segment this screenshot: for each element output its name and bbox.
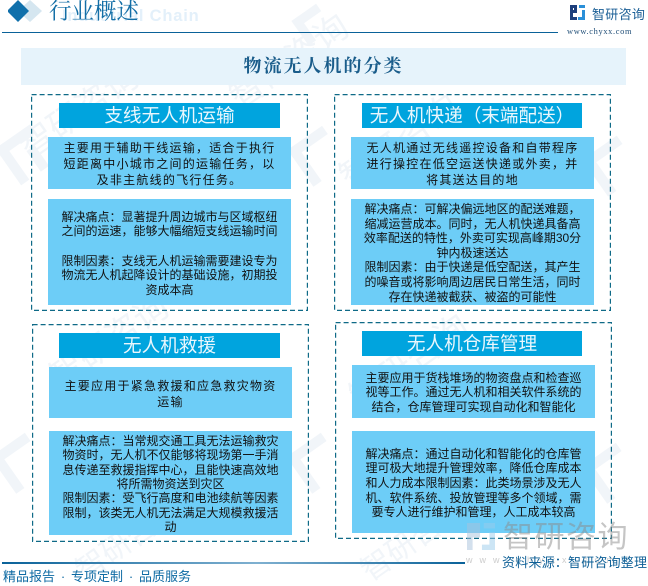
pain points and limits box: 将所需物资送到灾区 [116, 477, 224, 491]
description box [352, 365, 595, 418]
description box [48, 137, 291, 189]
pain points and limits box: 的噪音或将影响周边居民日常生活，同时 [364, 275, 580, 289]
pain points and limits box: 和人力成本限制因素：此类场景涉及无人 [365, 476, 582, 490]
description box: 主要应用于紧急救援和应急救灾物资 [64, 379, 276, 393]
title band [21, 48, 626, 85]
pain points and limits box: 缩减运营成本。同时，无人机快递具备高 [364, 217, 580, 231]
footer rule [2, 562, 465, 564]
header rule [2, 32, 558, 33]
pain points and limits box: 要专人进行维护和管理，人工成本较高 [371, 505, 576, 519]
pain points and limits box: 物资时，无人机不仅能够将现场第一手消 [62, 448, 278, 462]
text: 智研咨询 [13, 57, 146, 167]
pain points and limits box: 理可极大地提升管理效率，降低仓库成本 [365, 461, 582, 475]
brand url: www.chyxx.com [567, 27, 632, 36]
pain points and limits box: 限制因素：由于快递是低空配送，其产生 [364, 260, 580, 274]
pain points and limits box: 动 [164, 520, 176, 534]
watermark name: 智研咨询 [503, 521, 629, 554]
description box: 将其送达目的地 [426, 173, 519, 187]
pain points and limits box: 解决痛点：可解决偏远地区的配送难题， [364, 202, 580, 216]
footer slogan: · [61, 569, 65, 584]
panel title [59, 103, 280, 128]
brand name: 智研咨询 [592, 7, 645, 22]
description box: 及非主航线的飞行任务。 [97, 173, 242, 187]
pain points and limits box: 解决痛点：通过自动化和智能化的仓库管 [365, 447, 582, 461]
panel: 无人机仓库管理 [335, 322, 612, 539]
pain points and limits box [48, 199, 291, 305]
pain points and limits box: 物流无人机起降设计的基础设施，初期投 [61, 268, 278, 282]
pain points and limits box: 机、软件系统、投放管理等多个领域，需 [365, 491, 582, 505]
description box: 结合，仓库管理可实现自动化和智能化 [371, 400, 576, 414]
pain points and limits box: 限制因素：支线无人机运输需要建设专为 [61, 254, 278, 268]
panel title [59, 333, 280, 358]
text: 智研咨询 [223, 7, 356, 117]
panel title: 支线无人机运输 [104, 105, 235, 126]
description box: 主要应用于货栈堆场的物资盘点和检查巡 [365, 371, 582, 385]
pain points and limits box: 限制，该类无人机无法满足大规模救援活 [62, 506, 278, 520]
pain points and limits box: 钟内极速送达 [436, 246, 508, 260]
main title: 物流无人机的分类 [244, 56, 404, 76]
icon: logo mark [570, 5, 585, 20]
description box: 进行操控在低空运送快递或外卖，并 [366, 157, 578, 171]
panel title: 无人机快递（末端配送） [370, 105, 574, 126]
ghost English title: Industrial Chain [62, 7, 199, 25]
watermark: bottom right brand [466, 521, 629, 565]
description box [49, 367, 292, 418]
icon: double diamond [8, 0, 42, 22]
pain points and limits box [352, 431, 595, 533]
description box [351, 137, 594, 189]
panel title: 无人机仓库管理 [407, 333, 537, 354]
brand logo [567, 5, 645, 36]
panel title [362, 331, 582, 356]
description box: 无人机通过无线遥控设备和自带程序 [366, 141, 578, 155]
pain points and limits box: 息传递至救援指挥中心，且能快速高效地 [62, 463, 278, 477]
description box: 短距离中小城市之间的运输任务，以 [63, 157, 276, 171]
footer slogan: 精品报告 专项定制 品质服务 [3, 569, 191, 584]
pain points and limits box: 限制因素：受飞行高度和电池续航等因素 [62, 491, 278, 505]
pain points and limits box [49, 431, 292, 535]
pain points and limits box: 效率配送的特性，外卖可实现高峰期30分 [364, 231, 581, 245]
pain points and limits box: 解决痛点：显著提升周边城市与区域枢纽 [61, 210, 278, 224]
panel title: 无人机救援 [123, 335, 216, 356]
panel: 无人机救援 [32, 324, 309, 542]
text: 智研咨询 [43, 287, 176, 397]
panel: 支线无人机运输 [31, 94, 308, 311]
pain points and limits box: 存在快递被截获、被盗的可能性 [388, 290, 556, 304]
text: 智研咨询 [333, 87, 466, 197]
panel: 无人机快递 [334, 94, 611, 311]
pain points and limits box: 资成本高 [145, 283, 194, 297]
text: 智研咨询 [355, 492, 472, 586]
section header: 行业概述 [8, 0, 199, 25]
pain points and limits box [351, 199, 594, 305]
description box: 主要用于辅助干线运输，适合于执行 [63, 141, 276, 155]
pain points and limits box: 解决痛点：当常规交通工具无法运输救灾 [62, 434, 278, 448]
watermark url: www.chyxx.com [466, 555, 621, 565]
text: 智研咨询 [343, 307, 476, 417]
footer slogan: · [129, 569, 133, 584]
description box: 视等工作。通过无人机和相关软件系统的 [365, 385, 582, 399]
icon: watermark logo [467, 523, 495, 550]
description box: 运输 [157, 395, 184, 409]
text: 智研咨询 [70, 492, 187, 586]
pain points and limits box: 之间的运速，能够大幅缩短支线运输时间 [61, 224, 278, 238]
source note: 资料来源：智研咨询整理 [502, 555, 647, 570]
